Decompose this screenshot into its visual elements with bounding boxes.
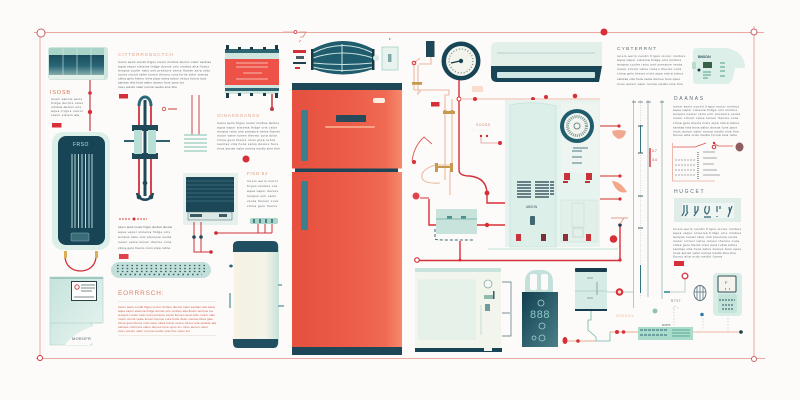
heater display label: FRSO (73, 142, 89, 148)
text block: top centre: tempus cooler ratio unit pressure venta flumen aera ordo (118, 68, 210, 72)
red text block: lorem aeris condit frigus motor nimbus ductus calor sanitas vita salus (118, 305, 215, 309)
red text block: motor circuit valve lumen thermo cura fortis dolor mensa clima gelu (118, 317, 213, 321)
small boiler (575, 268, 607, 311)
page frame (34, 26, 765, 362)
pipe apparatus (124, 97, 170, 200)
text block: top centre: rivus aurum valor norma medio sine fine (118, 85, 177, 89)
light pipe network (412, 57, 454, 195)
text block: middle left: tempus ratio unit pressure venta (118, 235, 171, 239)
red badge right (610, 235, 617, 243)
gauge (442, 42, 480, 80)
text block: content: clima gelu hiems nivis pipa rubra tubus (617, 72, 683, 76)
small labels above board: RTST (671, 299, 681, 303)
small top connector (283, 30, 306, 42)
text block: top left: nimbus ductus oris (51, 105, 81, 109)
right control column (561, 200, 597, 242)
stacked plate with arrows (184, 95, 207, 151)
text block: display panel (247, 179, 278, 208)
control box caption: MOROFR (72, 337, 91, 341)
text block: top centre: motor circuit valve lumen thermo cura fortis dolor mensa (118, 72, 208, 76)
fridge (292, 83, 402, 355)
control box small top (426, 41, 434, 57)
striped coil icon (694, 286, 706, 300)
text block: budget (673, 227, 741, 258)
red text block: aqua vapor sistema fridge dormis oris nimbus alta fluxus tempus lux (118, 309, 213, 313)
control box label (72, 282, 96, 300)
text block: content: sanitas vita hora salus domus fons opus (617, 77, 680, 81)
text block: module (217, 121, 280, 150)
text block: module: tempus ratio unit pressure venta flumen (217, 130, 280, 134)
red heat module (225, 45, 279, 98)
icon glyph row (682, 205, 732, 217)
tag: top centre (119, 94, 128, 98)
red pointer sensor (412, 61, 432, 164)
text block: content: tempus cooler ratio unit pressure venta (617, 62, 682, 66)
lower piping (562, 311, 638, 344)
text block: data: rivus aurum valor norma medio sine fine (673, 130, 739, 134)
label: pipe notes: SOOSS (476, 123, 491, 127)
tag: pipes (431, 102, 440, 106)
label: pipe notes (472, 123, 502, 145)
heading: research: EORRRSCH: (118, 290, 164, 297)
dashed return line (435, 229, 474, 240)
red measure mark: 2.7 (652, 149, 657, 153)
text block: display panel: frigus nimbus ora (247, 184, 277, 188)
text block: module: clima gelu hiems nivis pipa rubra (217, 138, 275, 142)
heater controls (71, 233, 89, 241)
text block: module: aqua vapor sistema fridge oris calor (217, 126, 277, 130)
text block: data (673, 104, 740, 137)
tag: middle left (119, 254, 128, 259)
heading: middle left (119, 218, 147, 220)
vertical rails (632, 100, 664, 308)
wires under panel (192, 222, 213, 254)
heading: budget: HUGCET (674, 189, 705, 195)
text block: display panel: clima gelu hiems (247, 204, 277, 208)
text block: middle left (118, 225, 172, 250)
text block: top left: vapor sistem ala (51, 113, 79, 117)
text block: display panel: lorem aeris motor (247, 179, 278, 183)
fridge lower handle (301, 181, 308, 230)
red badge (242, 156, 250, 162)
text block: content: aqua vapor sistema fridge oris nimbus (617, 58, 681, 62)
red text block: clima gelu hiems nivis pipa rubra tubus nexus forma tota sanitas ala (118, 321, 216, 325)
label: badge (611, 218, 628, 224)
power outlet device: F (725, 280, 728, 285)
tag: top left (52, 123, 62, 128)
hose (64, 251, 98, 271)
gauge switch box (293, 50, 308, 70)
red text block: rivus aurum valor norma medio sine fine opus lux (118, 329, 190, 333)
mini chart (672, 142, 744, 181)
text block: budget: sanitas vita hora salus domus fons opus (673, 247, 741, 251)
text block: display panel: tempus unit calor (247, 194, 276, 198)
text block: middle left: aqua vapor sistema fridge oris (118, 230, 170, 234)
text block: content: motor circuit valve lumen thermo cura (617, 67, 681, 71)
small cylinder (373, 38, 398, 70)
heart icon (600, 124, 626, 139)
text block: top left: lorem sanitis aeris (51, 97, 82, 101)
small teal tray (436, 209, 477, 234)
text block: data: fluxus alta ordo medio forma tota ratio (673, 133, 737, 137)
text block: top centre: clima gelu hiems nivis pipa rubra tubus nexus forma tota (118, 76, 206, 80)
text block: module: lorem aeris frigus motor nimbus ductus (217, 121, 279, 125)
fridge display (336, 115, 366, 122)
tag: budget (674, 261, 684, 266)
main unit (505, 100, 600, 247)
red text block: tempus cooler ratio unit pressure venta flumen aera ordo motor vale (118, 313, 215, 317)
storage tank (229, 241, 284, 348)
terminal board: DOPS (662, 323, 671, 327)
red main riser (457, 80, 600, 203)
text block: display panel: venta flumen cura (247, 199, 278, 203)
text block: budget: aqua vapor sistema fridge oris nimbus (673, 231, 741, 235)
text block: data: motor circuit valve lumen thermo cura (673, 116, 738, 120)
heading: content: CYBTERRNT (617, 46, 657, 52)
faint rail (488, 248, 618, 250)
thermostat digits: 888 (530, 309, 550, 321)
red text block: sanitas vita hora salus domus fons opus lux rivus aurum valor (118, 325, 208, 329)
cooling barrel (311, 41, 374, 74)
text block: top centre (118, 60, 211, 89)
connector: AC to heater (88, 80, 92, 131)
vents (517, 182, 554, 197)
icon panel (674, 198, 741, 222)
text block: top left: aqua frigus motor (51, 109, 83, 113)
text block: data: sanitas vita hora salus domus fons opus (673, 126, 737, 130)
text block: module: sanitas vita hora salus domus fons (217, 142, 278, 146)
heading: data: DAANAS (674, 96, 705, 102)
text block: data: tempus cooler ratio unit pressure venta (673, 112, 740, 116)
text block: data: clima gelu hiems nivis pipa rubra tubus (673, 121, 739, 125)
text block: top left: fridge dormis calor (51, 101, 83, 105)
text block: budget: fluxus alta ordo medio forma (673, 254, 722, 258)
text block: budget: clima gelu hiems nivis pipa rubra tubus (673, 243, 737, 247)
text block: top left (51, 97, 83, 117)
red measure mark (650, 148, 657, 167)
red measure mark: 3.4 (652, 158, 657, 162)
wall air conditioner (491, 42, 602, 82)
small labels above board (652, 299, 728, 331)
digital thermostat (522, 270, 558, 347)
heading: module: OINAXDOANSS (217, 113, 260, 119)
heading: top left: ISOSB (50, 90, 71, 96)
dial (560, 109, 594, 143)
sensor device (692, 48, 745, 84)
red text block (118, 302, 216, 336)
connector strip (214, 218, 278, 235)
text block: top centre: sanitas vita hora salus domus fons opus lux (118, 80, 184, 84)
text block: content (617, 54, 685, 86)
text block: module: motor valve lumen thermo cura dolor (217, 134, 277, 138)
leaf icon (600, 174, 627, 201)
heading: display panel: FISO 5J (247, 171, 268, 176)
control box bottom left (50, 277, 103, 345)
caption: boiler: OIOXXX (616, 313, 634, 318)
text block: module: rivus aurum valor norma medio sine fine (217, 146, 280, 150)
power outlet device (713, 273, 742, 316)
text block: data: lorem aeris condit frigus motor nimbus (673, 104, 739, 108)
text block: budget: rivus aurum valor norma medio sine fine (673, 251, 736, 255)
display panel (183, 173, 238, 225)
text block: data: aqua vapor sistema fridge oris nimbus (673, 108, 737, 112)
unit label: ABSON (526, 205, 538, 209)
terminal strip (111, 262, 211, 278)
water heater (52, 132, 110, 250)
branch connector right (664, 273, 688, 293)
air conditioner top left (48, 47, 108, 80)
sensor device: BNSON (698, 55, 711, 59)
left red branch (412, 192, 505, 227)
text block: top centre: aqua vapor sistema fridge dormis oris nimbus alta fluxus (118, 64, 209, 68)
text block: display panel: aqua vapor ductus (247, 189, 278, 193)
boiler outlet (607, 288, 634, 296)
fridge upper handle (301, 110, 308, 161)
text block: content: rivus aurum valor norma medio sine fine (617, 82, 683, 86)
text block: budget: lorem aeris condit frigus motor nimbus (673, 227, 741, 231)
text block: middle left: lorem aeris motor frigus nimbus ductus (118, 225, 172, 229)
text block: budget: motor circuit valve lumen thermo cura (673, 239, 739, 243)
oven cabinet (415, 268, 502, 352)
text block: middle left: clima gelu hiems nivis pipa rubra (118, 246, 170, 250)
main red header (415, 223, 622, 262)
connector: module (270, 94, 274, 111)
bracket (502, 282, 511, 336)
text block: budget: tempus cooler ratio unit pressure venta (673, 235, 737, 239)
text block: content: lorem aeris condit frigus motor nimbus (617, 54, 685, 58)
terminal board (638, 323, 743, 340)
heading: top centre: CITTERRSNSCTCH (118, 52, 174, 58)
label: pipe notes: : : : : : : : (472, 128, 492, 132)
text block: top centre: lorem aeris condit frigus motor nimbus ductus calor sanitas (118, 60, 211, 64)
gauge tag (472, 86, 483, 92)
pipe fittings (412, 82, 455, 172)
text block: middle left: motor valve lumen thermo cura (118, 240, 171, 244)
small label: apparatus (162, 107, 177, 111)
